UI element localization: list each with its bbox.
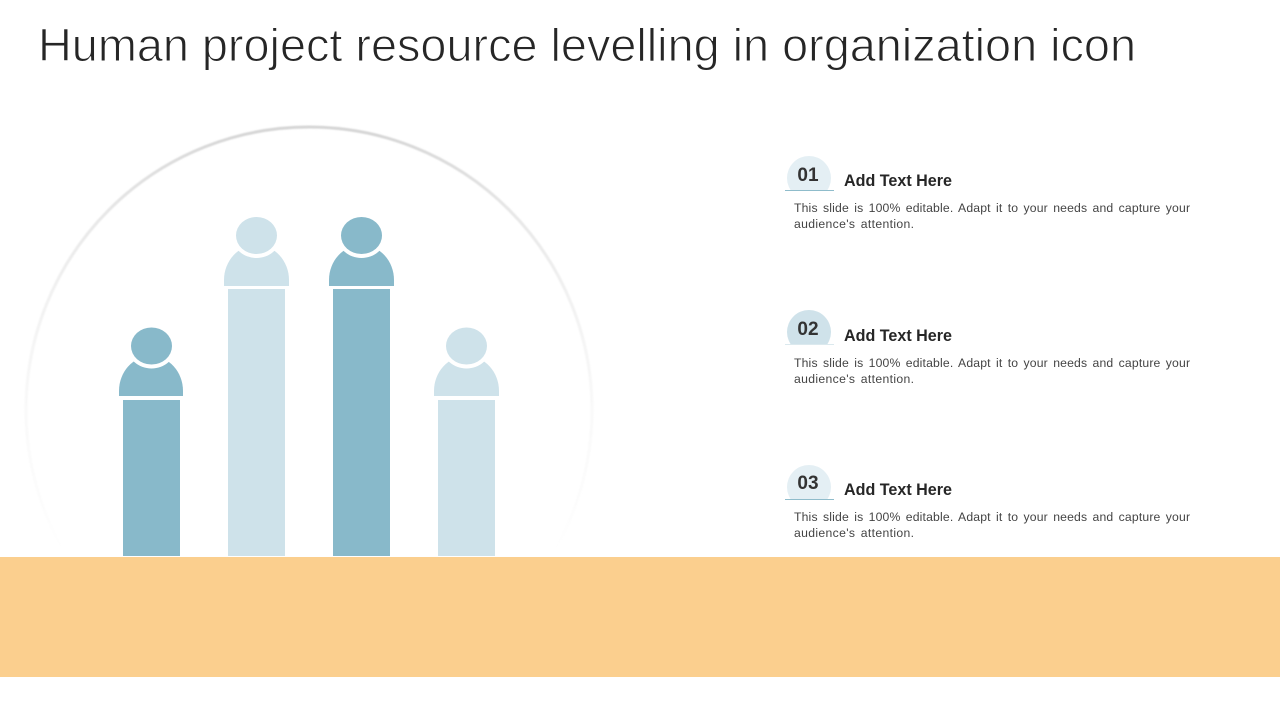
- ground band: [0, 557, 1280, 677]
- text block 01: audience's attention.: [794, 217, 914, 231]
- number badge 02: 02: [797, 319, 819, 340]
- person column 2: [224, 213, 289, 556]
- text block 02: This slide is 100% editable. Adapt it to your needs and capture your: [794, 356, 1190, 370]
- person column 1: [119, 324, 183, 556]
- text block 01: This slide is 100% editable. Adapt it to your needs and capture your: [794, 201, 1190, 215]
- number badge 03: 03: [797, 473, 819, 494]
- number badge 02: [785, 310, 834, 345]
- person column 3: [329, 213, 394, 556]
- text block 02: [794, 356, 1190, 386]
- text block 03: audience's attention.: [794, 526, 914, 540]
- text block 03: [794, 510, 1190, 540]
- item 01: [785, 156, 1190, 231]
- heading 03: Add Text Here: [844, 481, 952, 499]
- text block 02: audience's attention.: [794, 372, 914, 386]
- number badge 01: 01: [797, 165, 819, 186]
- item 03: [785, 465, 1190, 540]
- heading 02: Add Text Here: [844, 327, 952, 345]
- heading 01: Add Text Here: [844, 172, 952, 190]
- number badge 01: [785, 156, 834, 191]
- person column 4: [434, 324, 499, 556]
- panel: circle backdrop: [26, 127, 592, 693]
- title: Human project resource levelling in organization icon: [38, 19, 1136, 71]
- item 02: [785, 310, 1190, 386]
- text block 03: This slide is 100% editable. Adapt it to your needs and capture your: [794, 510, 1190, 524]
- number badge 03: [785, 465, 834, 500]
- text block 01: [794, 201, 1190, 231]
